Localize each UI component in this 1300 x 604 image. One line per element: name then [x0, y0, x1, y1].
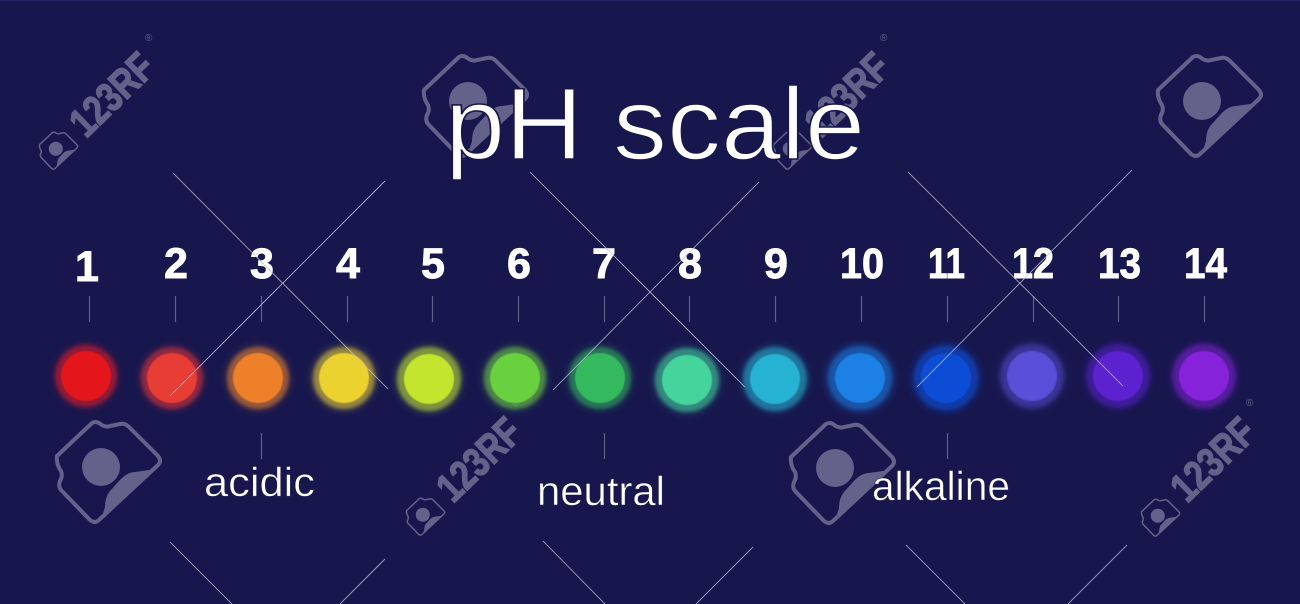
scale numbers: 14 [1184, 240, 1227, 288]
watermark: 123RF marks: 123RF [1161, 409, 1264, 510]
pH 12 circle [998, 342, 1066, 410]
pH 13 circle [1084, 342, 1152, 410]
pH 3 circle [225, 345, 291, 411]
pH 11 circle [911, 343, 981, 413]
pH 8 circle [653, 346, 721, 414]
pH 9 circle [741, 345, 809, 413]
label: neutral: neutral [537, 468, 665, 514]
watermark: 123RF marks: 123RF [427, 409, 530, 510]
scale numbers: 4 [336, 240, 360, 288]
watermark: 123RF marks: ® [1246, 398, 1254, 409]
label: alkaline: alkaline [872, 463, 1010, 509]
scale numbers: 9 [764, 240, 788, 288]
scale numbers: 7 [592, 240, 616, 288]
pH 5 circle [395, 345, 463, 413]
watermark: diagonal lines [170, 170, 1132, 604]
pH 10 circle [825, 343, 895, 413]
pH 1 circle [53, 343, 119, 409]
scale numbers: 2 [164, 240, 188, 288]
watermark: 123RF marks: 123RF [795, 44, 898, 145]
scale numbers: 10 [840, 240, 884, 288]
tick marks [90, 296, 1204, 459]
scale numbers: 13 [1098, 240, 1141, 288]
scale numbers: 1 [75, 243, 99, 291]
pH 14 circle [1170, 342, 1238, 410]
scale numbers: 11 [928, 240, 965, 288]
pH 6 circle [482, 345, 548, 411]
watermark: egg logos [57, 56, 1261, 523]
scale numbers: 3 [250, 240, 274, 288]
pH 4 circle [311, 345, 377, 411]
scale numbers [75, 240, 1227, 291]
scale numbers: 12 [1012, 240, 1054, 288]
watermark: 123RF marks: ® [880, 33, 888, 44]
watermark: 123RF marks: ® [145, 33, 153, 44]
watermark: 123RF marks [39, 33, 1264, 536]
pH 2 circle [139, 345, 205, 411]
watermark: 123RF marks: ® [512, 398, 520, 409]
label: acidic: acidic [204, 459, 315, 505]
scale numbers: 5 [421, 240, 445, 288]
colour circles [53, 342, 1238, 414]
title: pH scale [445, 67, 865, 181]
watermark: 123RF marks: 123RF [60, 44, 163, 145]
scale numbers: 8 [678, 240, 702, 288]
pH 7 circle [567, 345, 633, 411]
scale numbers: 6 [507, 240, 531, 288]
